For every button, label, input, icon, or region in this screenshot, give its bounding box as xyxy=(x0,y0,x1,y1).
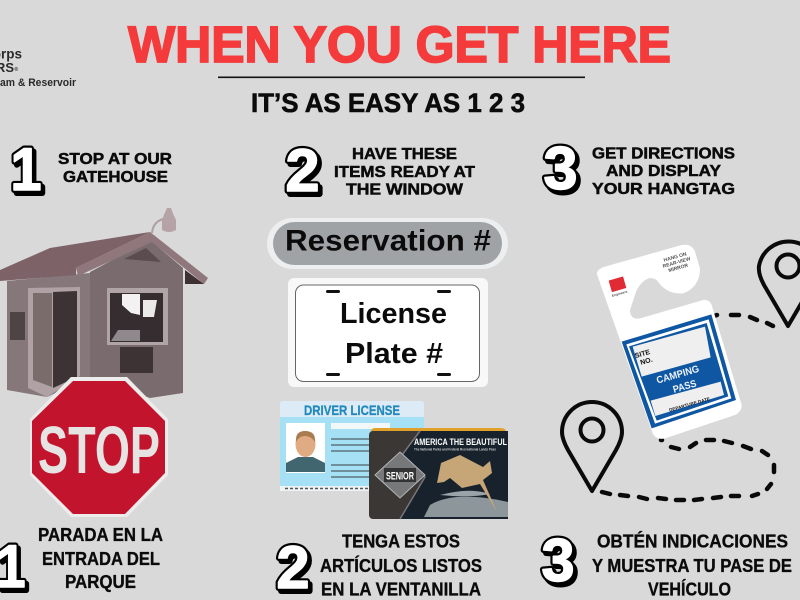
spanish step 2 heading xyxy=(320,532,482,600)
step 2 heading xyxy=(334,146,475,198)
reservation number pill xyxy=(267,218,508,269)
spanish step 2 heading: EN LA VENTANILLA xyxy=(321,580,481,600)
spanish step 2 number: 2 xyxy=(276,534,310,600)
logo text, clipped at left edge xyxy=(0,46,77,89)
america the beautiful senior pass card: The National Parks and Federal Recreational Lands Pass xyxy=(414,446,497,452)
spanish step 3 number: 3 xyxy=(544,530,577,597)
reservation number pill: Reservation # xyxy=(285,224,491,258)
logo text, clipped at left edge: am & Reservoir xyxy=(0,77,77,89)
icon: map pin left xyxy=(562,402,622,491)
america the beautiful senior pass card: AMERICA THE BEAUTIFUL xyxy=(414,437,507,448)
step 3 number: 3 xyxy=(546,138,580,205)
hangtag: camping pass xyxy=(597,245,742,439)
step 2 number: 2 xyxy=(286,137,320,204)
step 2 number: 2 xyxy=(288,140,322,207)
step 1 heading: GATEHOUSE xyxy=(63,169,168,186)
hangtag: camping pass: HANG ON xyxy=(663,251,688,264)
step 1 heading xyxy=(58,151,172,186)
step 3 heading: GET DIRECTIONS xyxy=(592,146,735,162)
hangtag: camping pass: NO. xyxy=(640,357,654,367)
step 1 number: 1 xyxy=(10,136,42,203)
spanish step 3 heading: VEHÍCULO xyxy=(648,578,731,600)
driver license card xyxy=(280,401,424,491)
hangtag: camping pass: SITE xyxy=(634,349,651,360)
spanish step 3 heading: OBTÉN INDICACIONES xyxy=(597,530,788,552)
hangtag: camping pass: MIRROR xyxy=(668,263,689,274)
step 1 heading: STOP AT OUR xyxy=(58,151,172,168)
icon: map pin right xyxy=(759,241,800,326)
step 3 number: 3 xyxy=(544,135,578,202)
america the beautiful senior pass card xyxy=(369,428,508,519)
america the beautiful senior pass card: SENIOR xyxy=(386,470,414,482)
subtitle: IT’S AS EASY AS 1 2 3 xyxy=(251,88,525,118)
spanish step 2 heading: TENGA ESTOS xyxy=(342,532,460,552)
hangtag: camping pass: DEPARTURE DATE xyxy=(669,396,711,413)
step 2 heading: ITEMS READY AT xyxy=(334,164,475,181)
spanish step 1 heading: PARQUE xyxy=(65,572,136,592)
spanish step 1 heading xyxy=(38,525,163,592)
license plate xyxy=(288,278,488,387)
spanish step 3 number: 3 xyxy=(542,527,574,594)
hangtag: camping pass: REAR-VIEW xyxy=(662,256,692,270)
dashed route from hangtag to right pin xyxy=(714,315,773,326)
step 2 heading: THE WINDOW xyxy=(346,182,464,198)
spanish step 3 heading xyxy=(592,530,792,600)
hangtag: camping pass: CAMPING xyxy=(655,364,701,387)
step 3 heading: AND DISPLAY xyxy=(606,163,721,180)
step 2 heading: HAVE THESE xyxy=(352,146,457,163)
spanish step 2 heading: ARTÍCULOS LISTOS xyxy=(320,555,482,576)
hangtag: camping pass: PASS xyxy=(672,378,698,396)
spanish step 1 heading: ENTRADA DEL xyxy=(42,549,160,569)
dashed route from hangtag to left pin xyxy=(602,440,774,500)
title: WHEN YOU GET HERE xyxy=(128,16,671,73)
icon: gatehouse xyxy=(0,208,208,398)
license plate: Plate # xyxy=(345,338,443,370)
driver license card: DRIVER LICENSE xyxy=(304,402,400,418)
license plate: License xyxy=(340,298,447,330)
step 2 number: 2 xyxy=(286,137,320,204)
spanish step 1 heading: PARADA EN LA xyxy=(38,525,163,545)
icon: stop sign: STOP xyxy=(38,413,160,488)
logo text, clipped at left edge: ® xyxy=(14,66,18,73)
step 3 heading xyxy=(592,146,735,198)
step 1 number: 1 xyxy=(13,139,44,206)
spanish step 2 number: 2 xyxy=(276,534,310,600)
spanish step 3 number: 3 xyxy=(542,527,574,594)
step 1 number: 1 xyxy=(10,136,42,203)
hangtag: camping pass: Engineers xyxy=(611,290,628,298)
step 3 number: 3 xyxy=(544,135,578,202)
step 3 heading: YOUR HANGTAG xyxy=(592,181,735,198)
icon: stop sign xyxy=(30,377,168,517)
